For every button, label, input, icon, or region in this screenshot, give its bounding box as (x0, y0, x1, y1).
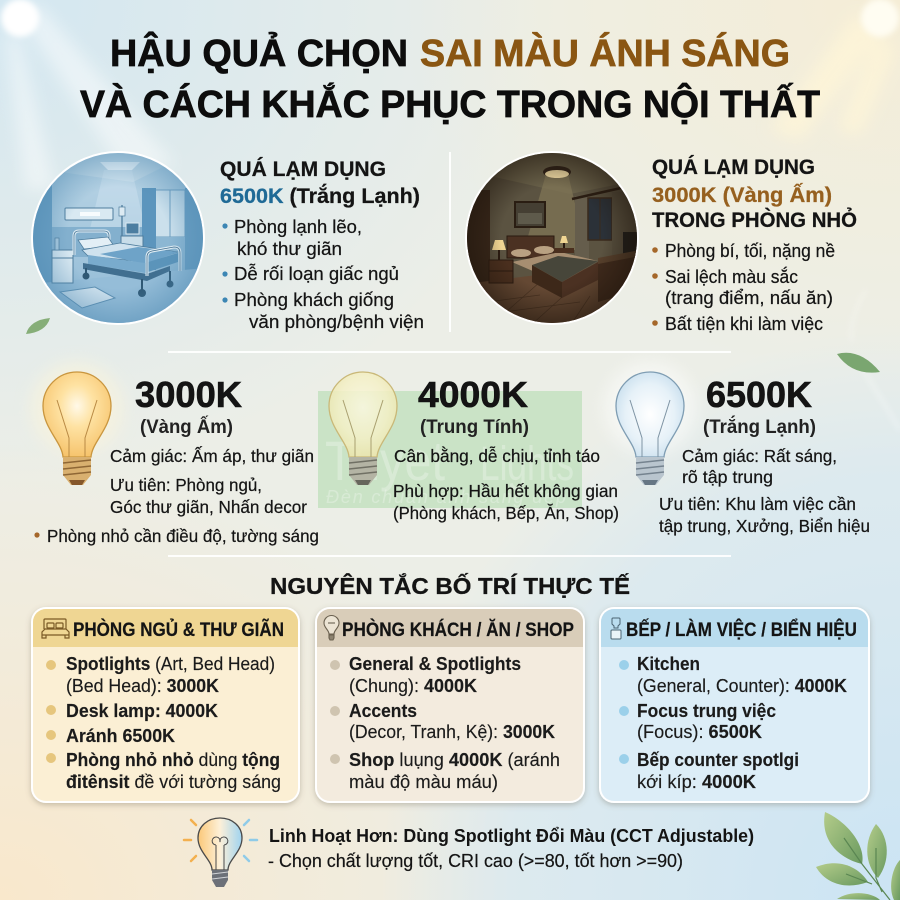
heading: overuse 6500K: QUÁ LẠM DỤNG (220, 158, 386, 181)
column: 3000K (31, 362, 319, 546)
list: bedroom rules: Aránh 6500K (66, 726, 175, 746)
text: 6500K details: tập trung, Xưởng, Biển hiệu (659, 516, 870, 536)
list: effects of 6500K: Phòng khách giống (234, 290, 394, 310)
text: adjustable spotlight tip (268, 826, 754, 871)
list: bedroom rules (46, 654, 281, 792)
heading: overuse 3000K: 3000K (Vàng Ấm) (652, 184, 832, 207)
list: living room rules: Shop luụng 4000K (aránh (349, 750, 560, 770)
divider (168, 351, 731, 353)
list: bedroom rules: Spotlights (Art, Bed Head) (66, 654, 275, 674)
heading: 6500K: 6500K (706, 374, 812, 415)
callout: adjustable spotlight (184, 818, 754, 887)
list: bedroom rules: (Bed Head): 3000K (66, 676, 219, 696)
heading: overuse 6500K: 6500K (Trắng Lạnh) (220, 184, 420, 208)
list: effects of 3000K: (trang điểm, nấu ăn) (665, 288, 833, 308)
text: 3000K details: Góc thư giãn, Nhấn decor (110, 497, 307, 517)
text: 4000K details: Phù hợp: Hầu hết không gian (393, 481, 618, 501)
title: SAI MÀU ÁNH SÁNG (420, 31, 790, 75)
heading: 4000K: (Trung Tính) (420, 417, 529, 438)
heading: overuse 3000K (652, 156, 857, 232)
text: adjustable spotlight tip: Linh Hoạt Hơn: Dùng Spotlight Đổi Màu (CCT Adjustable) (269, 826, 754, 846)
icon: bottle (611, 618, 621, 639)
icon: cool bulb (604, 362, 696, 485)
list: living room rules (330, 654, 560, 792)
list: bedroom rules: Desk lamp: 4000K (66, 701, 218, 721)
title (80, 31, 820, 126)
watermark: Lights (480, 438, 574, 491)
text: 6500K details: Cảm giác: Rất sáng, (682, 446, 837, 466)
card heading: PHÒNG NGỦ & THƯ GIÃN (73, 619, 284, 641)
list: living room rules: General & Spotlights (349, 654, 521, 674)
list: living room rules: (Decor, Tranh, Kệ): 3000K (349, 722, 555, 742)
card: living, dining, shop (315, 607, 585, 803)
list: effects of 3000K (652, 241, 835, 334)
list: effects of 6500K: Dễ rối loạn giấc ngủ (234, 263, 399, 284)
leaf: left (26, 318, 50, 334)
list: kitchen rules: (Focus): 6500K (637, 722, 762, 742)
text: 6500K details: rõ tập trung (682, 467, 773, 487)
heading: 6500K: (Trắng Lạnh) (703, 416, 816, 438)
text: 3000K details (34, 445, 319, 546)
watermark: Tuyet (325, 429, 445, 492)
list: effects of 3000K: Bất tiện khi làm việc (665, 314, 823, 334)
heading: overuse 6500K (220, 158, 420, 208)
column: 4000K (329, 372, 619, 523)
panel: overuse 6500K (30, 150, 424, 332)
icon: warm bulb (31, 362, 123, 485)
leaves: bottom right (816, 812, 900, 900)
list: living room rules: (Chung): 4000K (349, 676, 477, 696)
list: kitchen rules (619, 654, 847, 792)
list: living room rules: màu độ màu máu) (349, 772, 498, 792)
text: 4000K details: Cân bằng, dễ chịu, tỉnh táo (394, 445, 600, 466)
list: kitchen rules: Bếp counter spotlgi (637, 750, 799, 770)
list: effects of 3000K: Sai lệch màu sắc (665, 266, 798, 287)
list: effects of 3000K: Phòng bí, tối, nặng nề (665, 241, 835, 261)
list: kitchen rules: Kitchen (637, 654, 700, 674)
list: effects of 6500K: văn phòng/bệnh viện (249, 312, 424, 332)
illustration: cold hospital room (30, 150, 207, 326)
list: kitchen rules: (General, Counter): 4000K (637, 676, 847, 696)
icon: dual colour bulb (184, 818, 257, 887)
divider (168, 555, 731, 557)
list: effects of 6500K: Phòng lạnh lẽo, (234, 217, 362, 237)
card: bedroom and relax (31, 607, 300, 803)
text: 3000K details: Phòng nhỏ cần điều độ, tường sáng (47, 526, 319, 546)
panel: overuse 3000K (465, 150, 857, 334)
list: kitchen rules: Focus trung việc (637, 701, 776, 721)
watermark: Đèn chuẩn ánh sáng đẹp (326, 487, 566, 507)
leaf: right (837, 353, 880, 373)
list: effects of 6500K: khó thư giãn (237, 239, 342, 259)
text: 4000K details (393, 445, 619, 523)
text: 3000K details: Ưu tiên: Phòng ngủ, (110, 475, 262, 495)
card heading: BẾP / LÀM VIỆC / BIỂN HIỆU (626, 619, 857, 641)
card heading: PHÒNG KHÁCH / ĂN / SHOP (342, 619, 574, 641)
heading: overuse 3000K: QUÁ LẠM DỤNG (652, 156, 815, 179)
text: 6500K details (659, 446, 870, 536)
text: 6500K details: Ưu tiên: Khu làm việc cần (659, 494, 856, 514)
card: kitchen, work, signage (599, 607, 870, 803)
section heading: NGUYÊN TẮC BỐ TRÍ THỰC TẾ (270, 572, 630, 599)
icon: bed (42, 619, 69, 638)
list: bedroom rules: Phòng nhỏ nhỏ dùng tộng (66, 750, 280, 770)
icon: small bulb (324, 616, 339, 640)
watermark (318, 391, 582, 508)
divider (449, 152, 451, 332)
illustration: dim bedroom (465, 150, 640, 326)
list: kitchen rules: kới kíp: 4000K (637, 772, 756, 792)
text: 3000K details: Cảm giác: Ấm áp, thư giãn (110, 445, 314, 466)
list: effects of 6500K (222, 217, 424, 332)
list: bedroom rules: đitênsit đề với tường sáng (66, 772, 281, 792)
heading: 3000K (135, 374, 242, 438)
heading: 6500K (703, 374, 816, 438)
text: adjustable spotlight tip: - Chọn chất lượng tốt, CRI cao (>=80, tốt hơn >=90) (268, 851, 683, 871)
text: 4000K details: (Phòng khách, Bếp, Ăn, Shop) (393, 503, 619, 523)
title: HẬU QUẢ CHỌN (110, 31, 408, 75)
icon: neutral bulb (329, 372, 397, 485)
column: 6500K (604, 362, 870, 536)
heading: 3000K: (Vàng Ấm) (140, 416, 233, 438)
heading: 3000K: 3000K (135, 374, 242, 415)
heading: 4000K (418, 374, 529, 438)
list: living room rules: Accents (349, 701, 417, 721)
heading: 4000K: 4000K (418, 374, 528, 415)
title: VÀ CÁCH KHẮC PHỤC TRONG NỘI THẤT (80, 81, 820, 126)
heading: overuse 3000K: TRONG PHÒNG NHỎ (652, 208, 857, 232)
